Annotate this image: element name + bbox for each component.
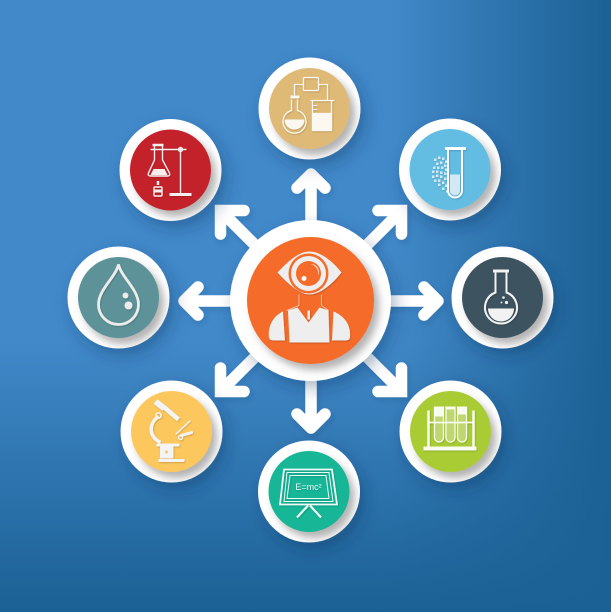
arrow: down (297, 371, 325, 428)
arrows radiating from hub (184, 174, 438, 428)
arrow: up right (351, 210, 402, 261)
icon: water drop (98, 264, 138, 324)
node: microscope (120, 380, 222, 482)
node: blackboard (258, 440, 360, 542)
icon: test tube with particles (432, 147, 466, 198)
arrow: down left (220, 341, 271, 392)
node: flask and beaker (258, 58, 360, 160)
icon: flask on ring stand with burner (148, 145, 192, 196)
arrow: right (381, 287, 438, 315)
arrow: left (184, 287, 241, 315)
node: test tube (399, 118, 501, 220)
icon: round bottom flask (485, 270, 517, 324)
arrow: up left (220, 210, 271, 261)
eye (278, 252, 342, 294)
arrow: up (297, 174, 325, 231)
node: water drop (68, 246, 170, 348)
icon: person with eye head (269, 252, 350, 342)
icon: microscope (151, 402, 192, 460)
icon: test tube rack (424, 406, 476, 450)
hub: observer (230, 220, 391, 381)
icon: distillation apparatus (283, 78, 334, 133)
arrow: down right (351, 341, 402, 392)
node: test tube rack (400, 380, 502, 482)
node: round flask (452, 246, 554, 348)
node: ring stand (120, 119, 222, 221)
formula: E=mc² (295, 482, 322, 492)
neck (286, 294, 328, 310)
body (269, 312, 285, 340)
